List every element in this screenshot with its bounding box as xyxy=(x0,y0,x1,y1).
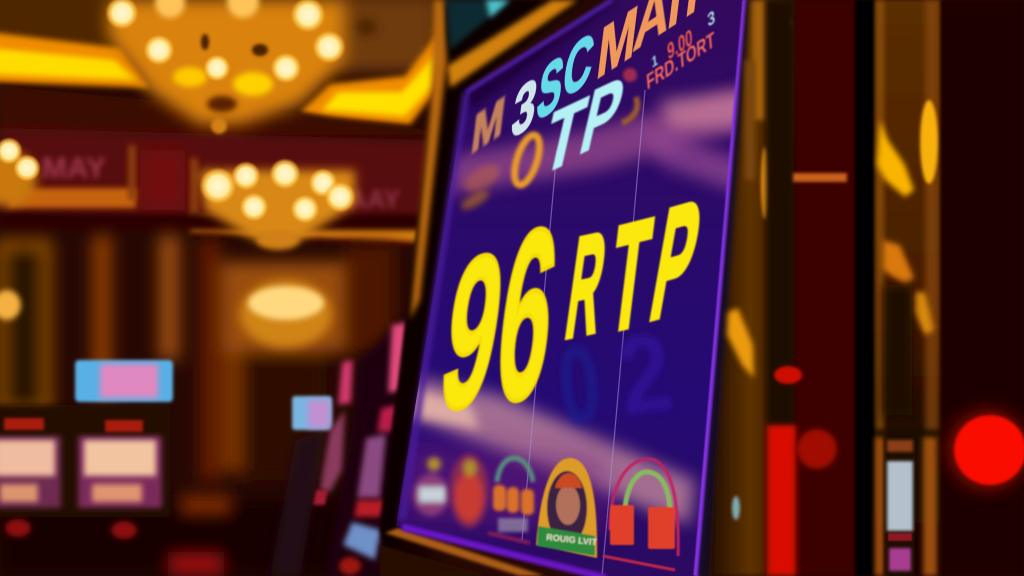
big number 96: 6 xyxy=(485,176,570,454)
slot icons row xyxy=(413,454,678,570)
heading: M3SC MAII: C xyxy=(559,17,598,116)
wall lamp left xyxy=(0,290,21,320)
big label RTP: T xyxy=(602,187,658,365)
red sign band xyxy=(0,128,432,245)
chandelier lower xyxy=(240,280,332,348)
screen dark corner xyxy=(466,0,620,110)
heading: TP: T xyxy=(534,78,594,196)
small red text top right: 9.00 xyxy=(666,25,693,66)
panel: main slot screen: 2 xyxy=(611,309,679,439)
small red text top right: 3 xyxy=(707,6,716,31)
icon: red figure symbol xyxy=(450,454,488,528)
small coin symbols xyxy=(458,68,637,213)
icon: arch with three coins xyxy=(488,458,534,543)
chandelier top xyxy=(105,0,346,134)
big number 96: 9 xyxy=(428,206,518,456)
icon: bell symbol xyxy=(413,457,449,516)
wall panels with gold frames xyxy=(0,235,395,576)
icon: portrait card: ROUIG LVIT xyxy=(546,532,598,547)
main machine cabinet frame xyxy=(380,0,585,576)
background slot machines left xyxy=(0,360,173,539)
icon: portrait card xyxy=(536,458,598,558)
big label RTP: R xyxy=(559,202,614,369)
red sign band: AAY xyxy=(348,184,401,214)
heading: M3SC MAII: 3 xyxy=(508,61,541,154)
big number 96 xyxy=(428,176,570,456)
right cabinet xyxy=(698,0,875,576)
icon: twin red drums xyxy=(603,459,678,570)
faint dark digits: 0 xyxy=(553,321,606,448)
heading: M3SC MAII: S xyxy=(533,39,568,139)
screen neon edges xyxy=(466,0,612,92)
panel: main slot screen xyxy=(396,0,760,576)
heading: M3SC MAII: M xyxy=(469,84,508,166)
heading: M3SC MAII xyxy=(469,0,704,166)
ceiling with glowing yellow band xyxy=(0,0,447,135)
heading: TP: P xyxy=(572,56,632,175)
small red text top right: 1 xyxy=(651,50,659,71)
red glowing light xyxy=(946,408,1024,492)
red sign band: MAY xyxy=(42,152,106,185)
chandelier middle xyxy=(199,158,356,250)
big label RTP xyxy=(559,165,711,369)
small red text top right: FRD.TORT xyxy=(645,26,716,94)
chandelier left edge xyxy=(0,137,41,206)
heading: TP xyxy=(534,56,632,196)
big label RTP: P xyxy=(641,165,711,354)
reel dividers xyxy=(522,90,645,576)
far right column xyxy=(875,0,1024,576)
background slot machines centre xyxy=(270,320,415,576)
pink light streaks xyxy=(430,90,760,195)
